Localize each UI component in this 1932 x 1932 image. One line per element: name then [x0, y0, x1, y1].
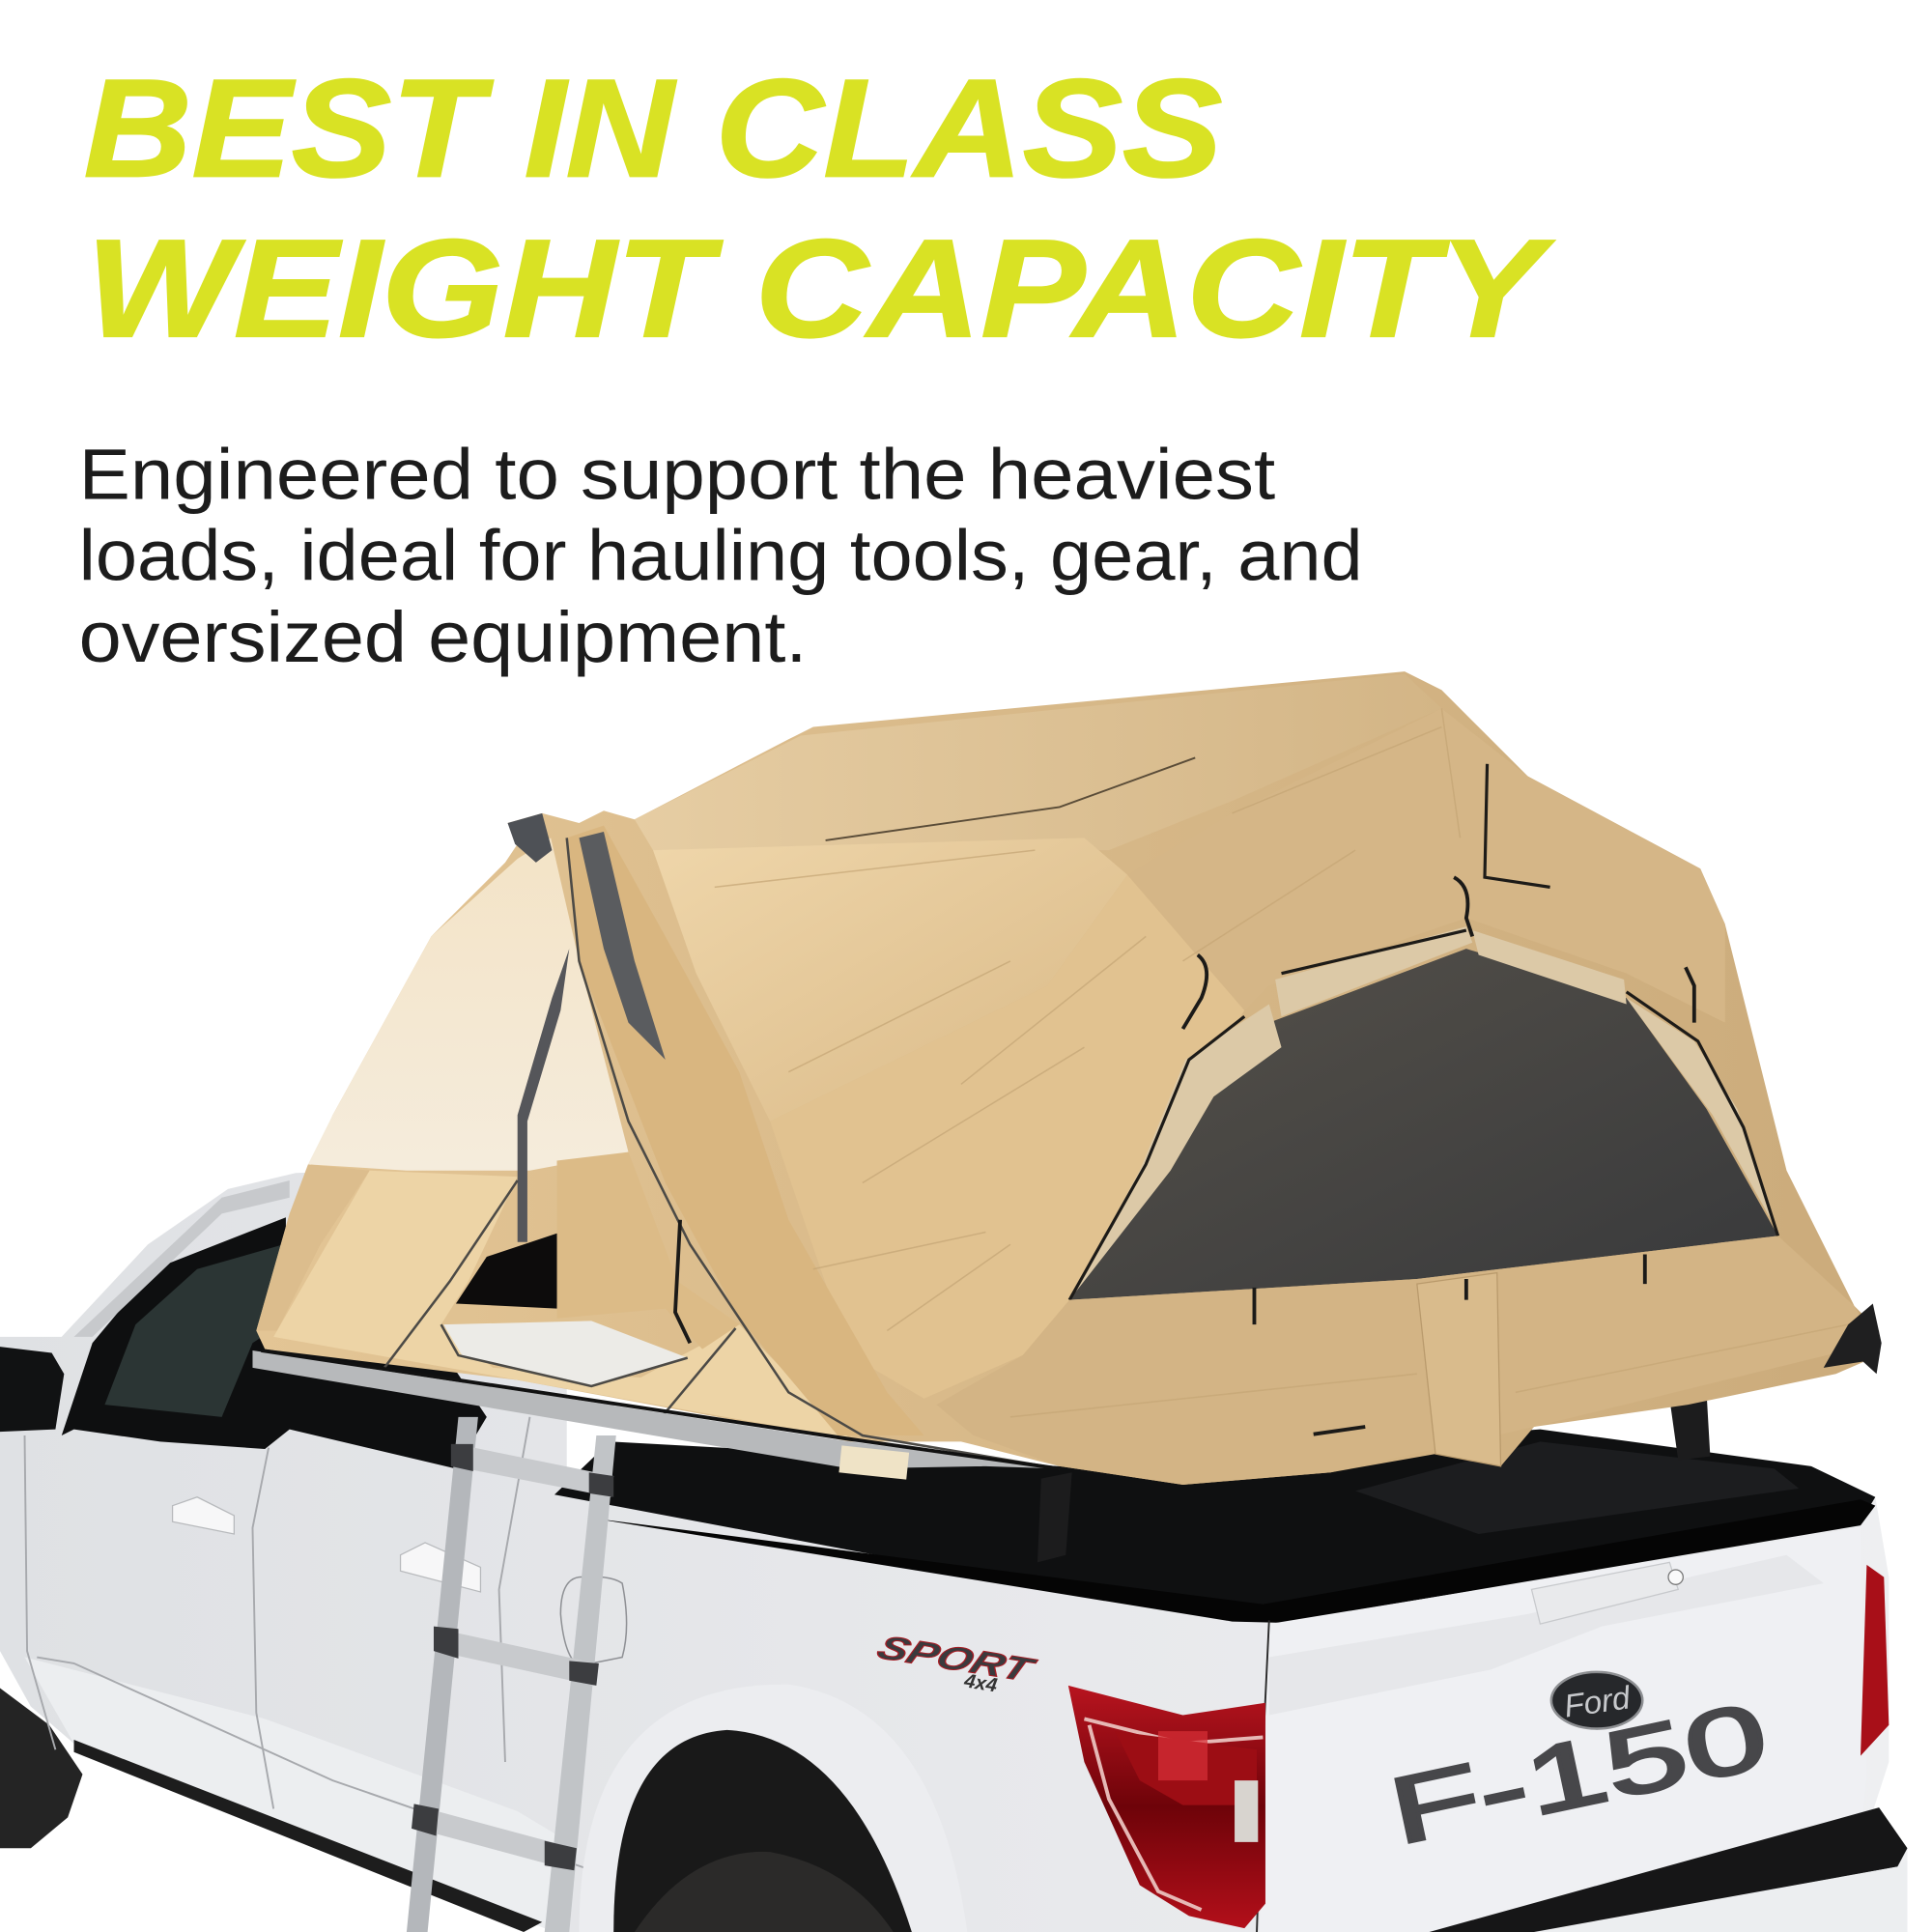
rear bumper [1430, 1807, 1907, 1932]
lower side panel [770, 875, 1244, 1399]
front folded canvas [256, 1164, 370, 1331]
Sport 4x4 badge: 4x4 [962, 1670, 999, 1696]
sill shadow [74, 1740, 542, 1932]
F-150 badge: F-150 [1380, 1682, 1776, 1864]
ladder rungs [416, 1444, 613, 1870]
door handles [173, 1497, 480, 1592]
corner hardware at rear [1824, 1303, 1882, 1374]
description text [79, 435, 1363, 677]
wrinkle lines [715, 708, 1848, 1417]
tent opening [456, 1233, 560, 1309]
title [84, 50, 1554, 366]
ladder brackets [412, 1444, 613, 1870]
title: WEIGHT CAPACITY [86, 211, 1554, 366]
tail light right [1861, 1565, 1889, 1756]
front lower panel [273, 1171, 850, 1439]
zip seams [384, 757, 1195, 1468]
tailgate [1257, 1528, 1866, 1932]
side mirror [0, 1347, 64, 1432]
pillar highlight [74, 1180, 290, 1337]
telescoping ladder [407, 1417, 616, 1932]
bottom tan band [936, 1236, 1877, 1485]
ladder rails [407, 1417, 478, 1932]
lower door shading [25, 1658, 579, 1932]
grey zip flap [579, 832, 666, 1060]
description text: loads, ideal for hauling tools, gear, and [79, 516, 1363, 596]
front tire [0, 1688, 82, 1848]
bed cover [554, 1430, 1875, 1622]
hanging strap [518, 949, 569, 1242]
window flaps [1069, 926, 1778, 1300]
bed rail cap [591, 1499, 1875, 1623]
cream front panel [308, 838, 629, 1171]
hanging flap [1417, 1273, 1501, 1466]
Sport 4x4 badge [871, 1630, 1041, 1696]
cab window and beltline [62, 1217, 487, 1468]
tail light left [1068, 1686, 1265, 1928]
rear tire [635, 1852, 894, 1932]
tent silhouette [256, 671, 1879, 1485]
window glass [104, 1244, 283, 1417]
roof panel [635, 674, 1441, 850]
Sport 4x4 badge: SPORT [871, 1630, 1041, 1689]
description text: oversized equipment. [79, 597, 807, 677]
Ford badge [1551, 1672, 1642, 1729]
door seams [25, 1417, 635, 1886]
rooftop tent [252, 671, 1882, 1485]
rear upper panel [1127, 708, 1725, 1023]
mesh window [1069, 949, 1778, 1300]
mattress [443, 1321, 688, 1386]
folded center canvas [567, 826, 924, 1435]
roof rack post [1037, 1392, 1710, 1562]
truck body [0, 1164, 1907, 1932]
Ford badge: Ford [1562, 1680, 1634, 1725]
title: BEST IN CLASS [84, 50, 1222, 206]
fender and wheel arch [579, 1685, 967, 1932]
description text: Engineered to support the heaviest [79, 435, 1276, 515]
straps and loops [675, 877, 1694, 1435]
tent base rail [252, 1350, 1060, 1480]
pickup truck [0, 1164, 1907, 1932]
dark grey knot [508, 813, 552, 863]
upper side panel [653, 838, 1127, 1122]
window border seams [1069, 764, 1778, 1300]
bed cover sheen [1355, 1441, 1799, 1534]
inner hanging panel [557, 1152, 739, 1350]
